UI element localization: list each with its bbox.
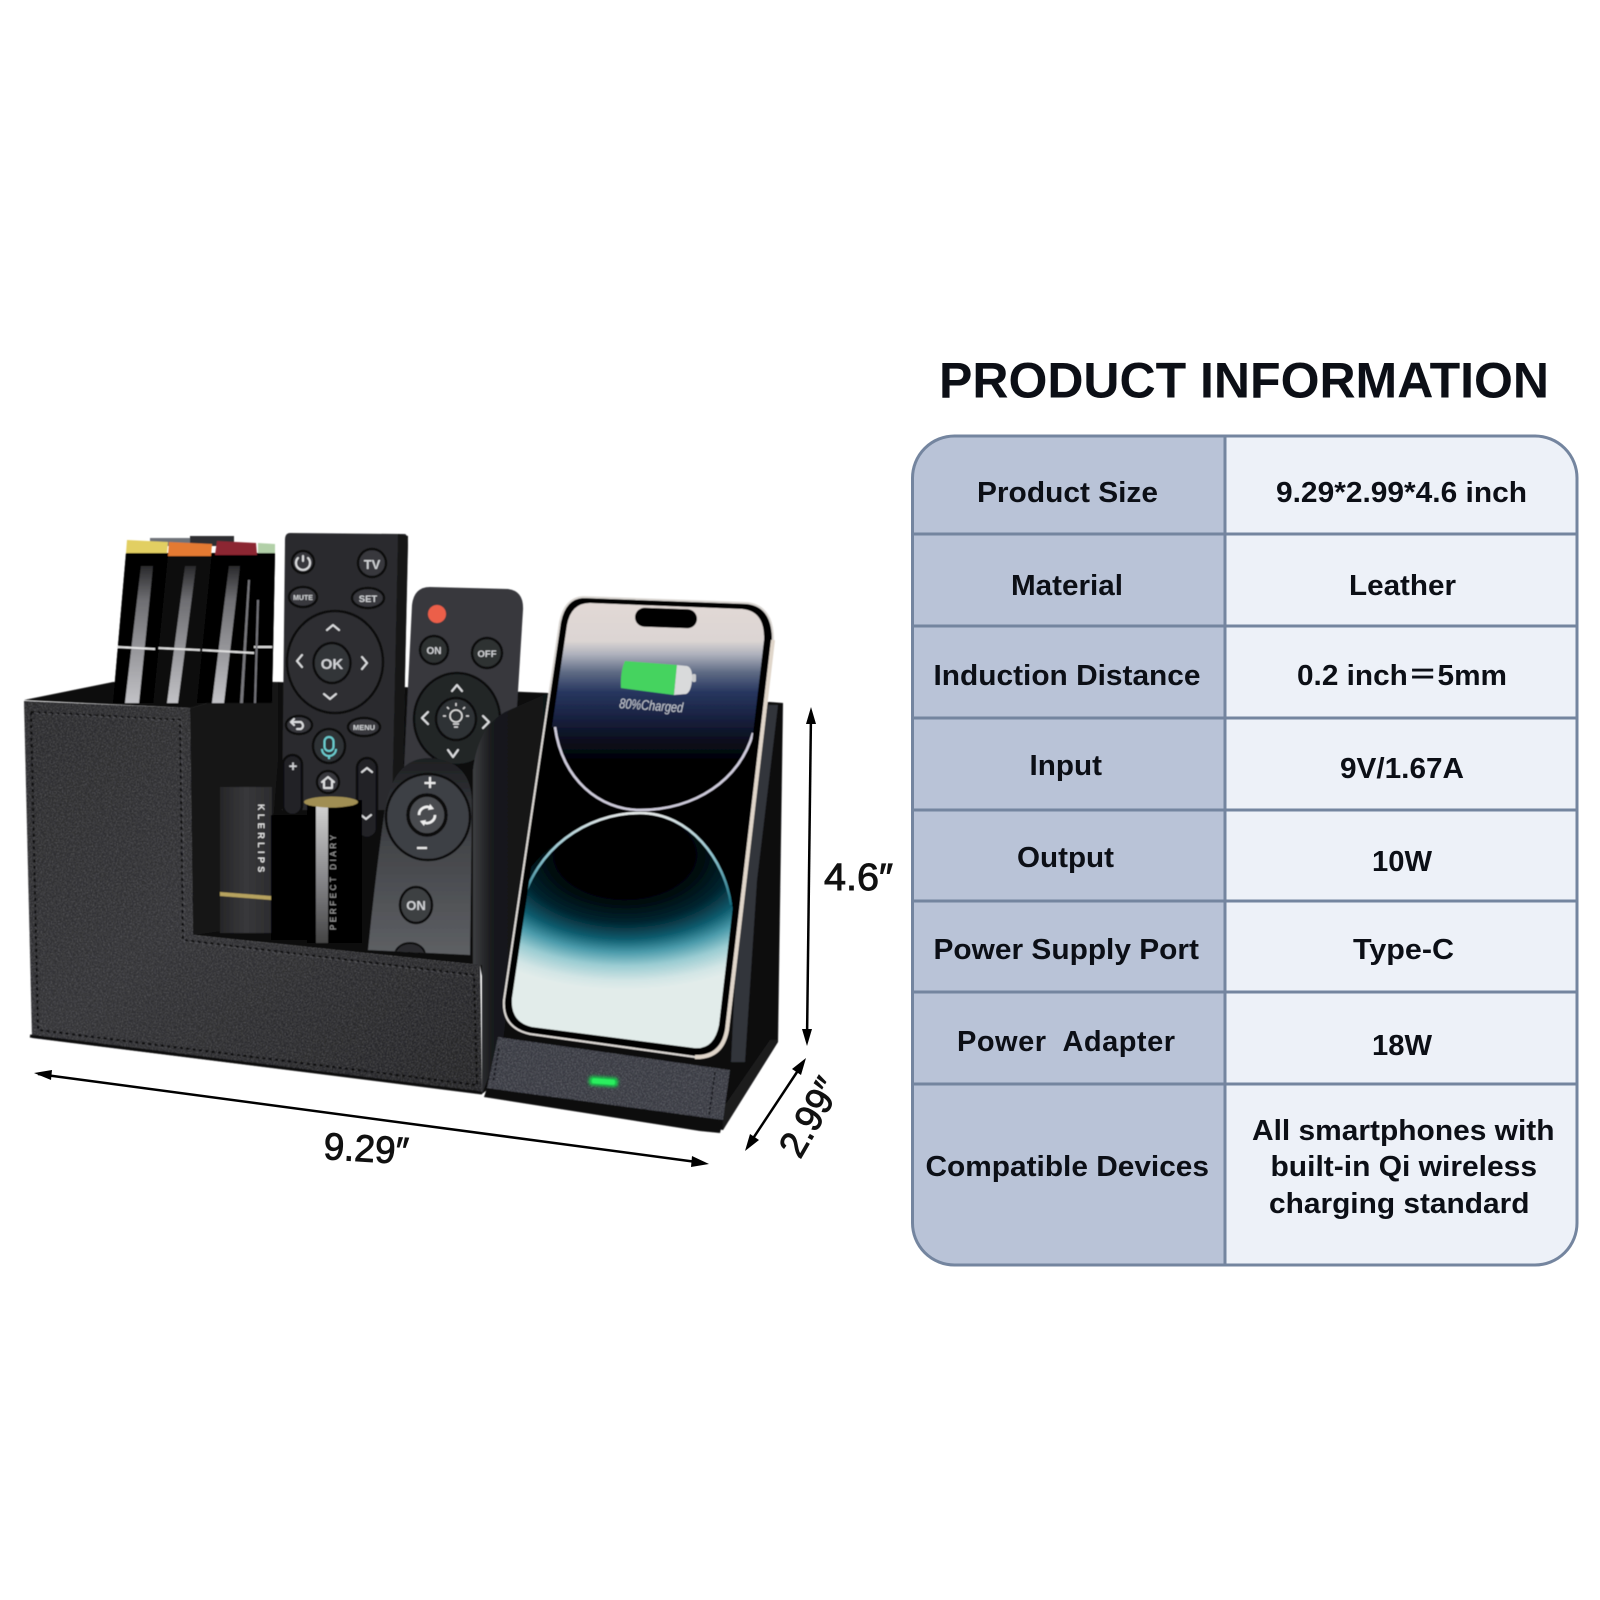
battery caption: 80%Charged <box>619 695 685 716</box>
arrow: height <box>802 707 816 1046</box>
row: product size: Product Size <box>977 477 1158 509</box>
remote control: tall: MENU <box>353 723 375 732</box>
marker 1 <box>113 540 168 703</box>
indicator light <box>589 1076 618 1087</box>
row: output: 10W <box>1372 846 1433 878</box>
arrow: width <box>34 1070 709 1167</box>
marker 3 <box>200 541 257 703</box>
marker 4 <box>253 543 275 703</box>
phone camera island <box>635 607 697 629</box>
row: product size <box>977 477 1527 509</box>
product: desk organizer with wireless charger <box>20 533 783 1133</box>
row: material <box>1011 570 1456 602</box>
remote control: front round: ON <box>406 898 426 913</box>
row: power adapter <box>957 1026 1433 1062</box>
charging base pad <box>484 1034 734 1133</box>
row: output <box>1017 842 1433 878</box>
organizer right partition <box>473 693 548 1094</box>
organizer interior <box>24 682 783 1130</box>
organizer front panel <box>20 695 490 1100</box>
row: compatible devices: Compatible Devices <box>926 1151 1209 1183</box>
remote control: tall: MUTE <box>293 595 313 602</box>
remote control: tall: + <box>289 758 298 775</box>
row: power supply port <box>934 934 1454 966</box>
remote control: medium <box>403 587 523 790</box>
label: depth: 2.99″ <box>771 1071 850 1164</box>
label: width: 9.29″ <box>322 1126 410 1173</box>
row: power adapter: 18W <box>1372 1030 1433 1062</box>
remote control: medium: OFF <box>478 649 497 660</box>
panel stitching <box>31 712 477 1085</box>
title: PRODUCT INFORMATION <box>939 352 1549 408</box>
row: compatible devices: charging standard <box>1269 1188 1530 1220</box>
marker 2 <box>153 542 212 703</box>
lipstick: slim <box>271 796 362 943</box>
row: compatible devices: built-in Qi wireless <box>1270 1151 1537 1183</box>
markers <box>113 536 275 703</box>
row: induction distance <box>934 660 1507 692</box>
row: power supply port: Power Supply Port <box>934 934 1199 966</box>
row: compatible devices <box>926 1115 1554 1220</box>
row: input <box>1030 750 1464 785</box>
label: height: 4.6″ <box>824 857 893 899</box>
row: material: Leather <box>1349 570 1456 602</box>
remote control: tall <box>282 533 408 838</box>
phone screen <box>510 602 765 1050</box>
remote control: tall: SET <box>359 594 377 605</box>
row: power adapter: Power Adapter <box>957 1026 1175 1058</box>
row: product size: 9.29*2.99*4.6 inch <box>1276 477 1527 509</box>
remote control: medium: ON <box>426 646 442 657</box>
phone <box>500 597 780 1057</box>
lipstick: slim: PERFECT DIARY <box>329 832 338 930</box>
row: induction distance: Induction Distance <box>934 660 1200 692</box>
remote buttons <box>283 549 386 838</box>
lipstick: square <box>220 780 272 933</box>
row: input: 9V/1.67A <box>1340 753 1464 785</box>
remote control: tall: OK <box>321 656 343 673</box>
lipstick: square: KLERLIPS <box>256 804 266 876</box>
arrow: depth <box>745 1058 806 1151</box>
row: compatible devices: All smartphones with <box>1252 1115 1554 1147</box>
panel: specification table <box>912 436 1577 1265</box>
remote control: front round <box>368 758 472 967</box>
row: induction distance: 0.2 inch＝5mm <box>1297 660 1507 692</box>
remote control: tall: TV <box>364 557 381 572</box>
battery icon <box>621 661 696 695</box>
row: output: Output <box>1017 842 1114 874</box>
row: power supply port: Type-C <box>1353 934 1454 966</box>
row: input: Input <box>1030 750 1102 782</box>
row: material: Material <box>1011 570 1123 602</box>
